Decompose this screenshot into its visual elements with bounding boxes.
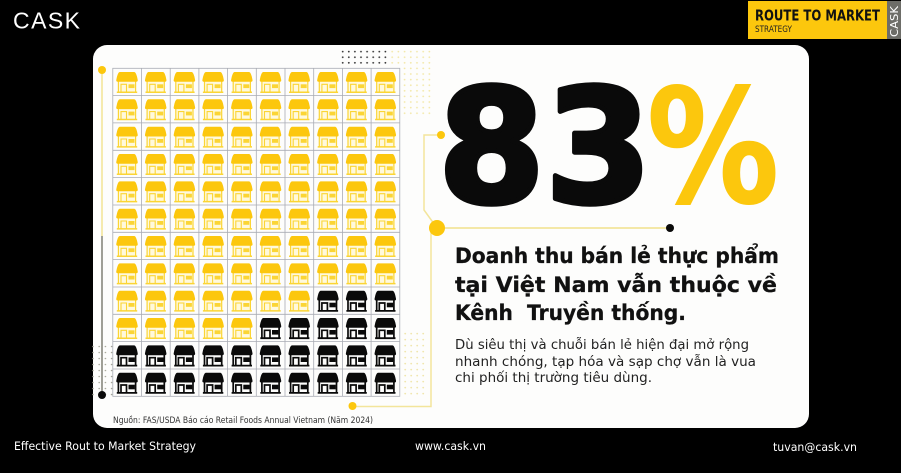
heading: tại Việt Nam vẫn thuộc về [455,273,777,298]
badge: route to market: CASK [888,5,901,37]
heading [455,243,779,326]
body text: Dù siêu thị và chuỗi bán lẻ hiện đại mở rộng [455,336,749,353]
heading: Doanh thu bán lẻ thực phẩm [455,243,779,269]
icons: row 7 [116,236,396,256]
logo: CASK: CASK [13,8,81,34]
badge: route to market: STRATEGY [755,25,793,35]
dot pattern: lower left [91,344,113,398]
footer: Effective Rout to Market Strategy [14,439,196,453]
dot pattern: top yellow [390,49,433,118]
big number: percent sign: % [647,56,779,240]
body text [455,336,756,386]
footer: www.cask.vn [415,439,486,453]
icons: row 4 [116,154,396,174]
icons: row 12 [116,373,396,393]
icons: row 10 [116,318,396,338]
big number: 83: 83 [438,56,652,240]
icons: row 8 [116,263,396,284]
icons: row 2 [116,99,396,120]
panel: white card [91,45,809,428]
body text: chi phối thị trường tiêu dùng. [455,369,652,386]
footer [14,439,857,454]
footer: tuvan@cask.vn [773,440,857,454]
dot pattern: lower right [403,331,425,397]
icons: row 5 [116,181,396,202]
dot pattern: top black [340,49,389,66]
badge: route to market [748,1,901,39]
icons: row 1 [116,72,396,92]
connector: divider line with dots [348,220,674,410]
icons: row 9 [116,291,396,311]
body text: nhanh chóng, tạp hóa và sạp chợ vẫn là vua [455,353,756,370]
heading: Kênh Truyền thống. [455,301,686,326]
icons: row 3 [116,127,396,147]
connector: left timeline [98,66,106,399]
connector: bracket around 83% [424,131,445,228]
source note: Nguồn: FAS/USDA Báo cáo Retail Foods Annual Vietnam (Năm 2024) [113,415,373,426]
icons: row 6 [116,209,396,229]
chart: store pictogram grid [113,68,400,396]
icons: row 11 [116,345,396,366]
